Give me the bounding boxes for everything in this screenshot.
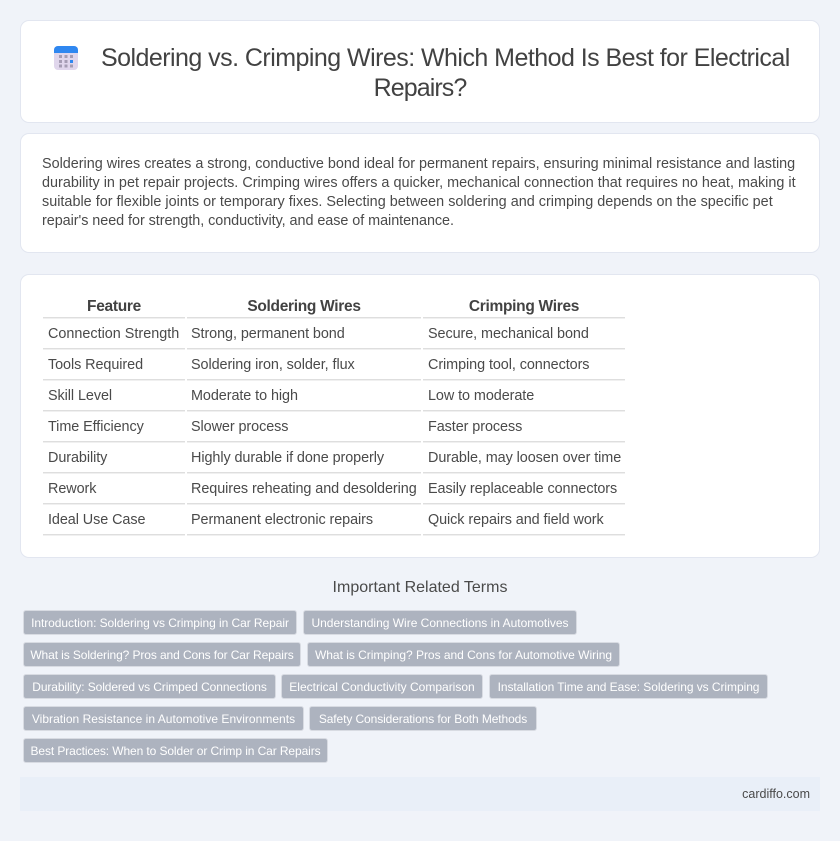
- footer source: cardiffo.com: [742, 787, 810, 801]
- table rows: Soldering iron, solder, flux: [191, 357, 355, 373]
- related terms tags: What is Soldering? Pros and Cons for Car Repairs: [30, 648, 294, 662]
- table rows: Skill Level: [48, 388, 112, 404]
- intro text: repair's need for strength, conductivity, and ease of maintenance.: [42, 213, 454, 229]
- related terms tags: [23, 610, 768, 763]
- footer bar: [20, 777, 820, 811]
- table rows: Time Efficiency: [48, 419, 144, 435]
- title: Repairs?: [374, 74, 466, 102]
- related terms tags: Durability: Soldered vs Crimped Connections: [32, 680, 267, 694]
- table rows: Slower process: [191, 419, 288, 435]
- table rows: Low to moderate: [428, 388, 534, 404]
- related terms tags: Electrical Conductivity Comparison: [289, 680, 475, 694]
- table rows: Rework: [48, 481, 96, 497]
- table header: crimping wires: Crimping Wires: [469, 298, 579, 315]
- panel: introduction: [20, 133, 820, 253]
- table rows: Durability: [48, 450, 107, 466]
- table rows: Highly durable if done properly: [191, 450, 384, 466]
- table rows: Quick repairs and field work: [428, 512, 604, 528]
- table rows: Easily replaceable connectors: [428, 481, 617, 497]
- table header: soldering wires: Soldering Wires: [247, 298, 361, 315]
- intro text: [42, 156, 796, 229]
- table header: feature: Feature: [87, 298, 141, 315]
- related terms tags: What is Crimping? Pros and Cons for Automotive Wiring: [315, 648, 612, 662]
- table rows: Strong, permanent bond: [191, 326, 345, 342]
- related terms tags: Introduction: Soldering vs Crimping in Car Repair: [31, 616, 289, 630]
- title: [101, 44, 790, 102]
- related terms tags: Safety Considerations for Both Methods: [319, 712, 527, 726]
- intro text: Soldering wires creates a strong, conductive bond ideal for permanent repairs, ensuring minimal resistance and lasting: [42, 156, 795, 172]
- table rows: Secure, mechanical bond: [428, 326, 589, 342]
- table rows: Moderate to high: [191, 388, 298, 404]
- icon: calendar: [54, 46, 78, 70]
- table rows: Connection Strength: [48, 326, 179, 342]
- table rows: Faster process: [428, 419, 522, 435]
- table rows: Tools Required: [48, 357, 143, 373]
- title: Soldering vs. Crimping Wires: Which Method Is Best for Electrical: [101, 44, 790, 72]
- related terms tags: Best Practices: When to Solder or Crimp in Car Repairs: [30, 744, 321, 758]
- panel: comparison table: [20, 274, 820, 558]
- table rows: [43, 317, 625, 536]
- table rows: Crimping tool, connectors: [428, 357, 589, 373]
- related terms tags: Vibration Resistance in Automotive Environments: [32, 712, 295, 726]
- intro text: durability in pet repair projects. Crimping wires offers a quicker, mechanical connection that requires no heat, making it: [42, 175, 796, 191]
- related terms heading: Important Related Terms: [333, 579, 507, 596]
- table rows: Permanent electronic repairs: [191, 512, 373, 528]
- related terms tags: Understanding Wire Connections in Automotives: [311, 616, 569, 630]
- panel: title card: [20, 20, 820, 123]
- table rows: Ideal Use Case: [48, 512, 145, 528]
- table rows: Durable, may loosen over time: [428, 450, 621, 466]
- table rows: Requires reheating and desoldering: [191, 481, 417, 497]
- intro text: suitable for flexible joints or temporary fixes. Selecting between soldering and crimping depends on the specific pet: [42, 194, 773, 210]
- related terms tags: Installation Time and Ease: Soldering vs Crimping: [498, 680, 759, 694]
